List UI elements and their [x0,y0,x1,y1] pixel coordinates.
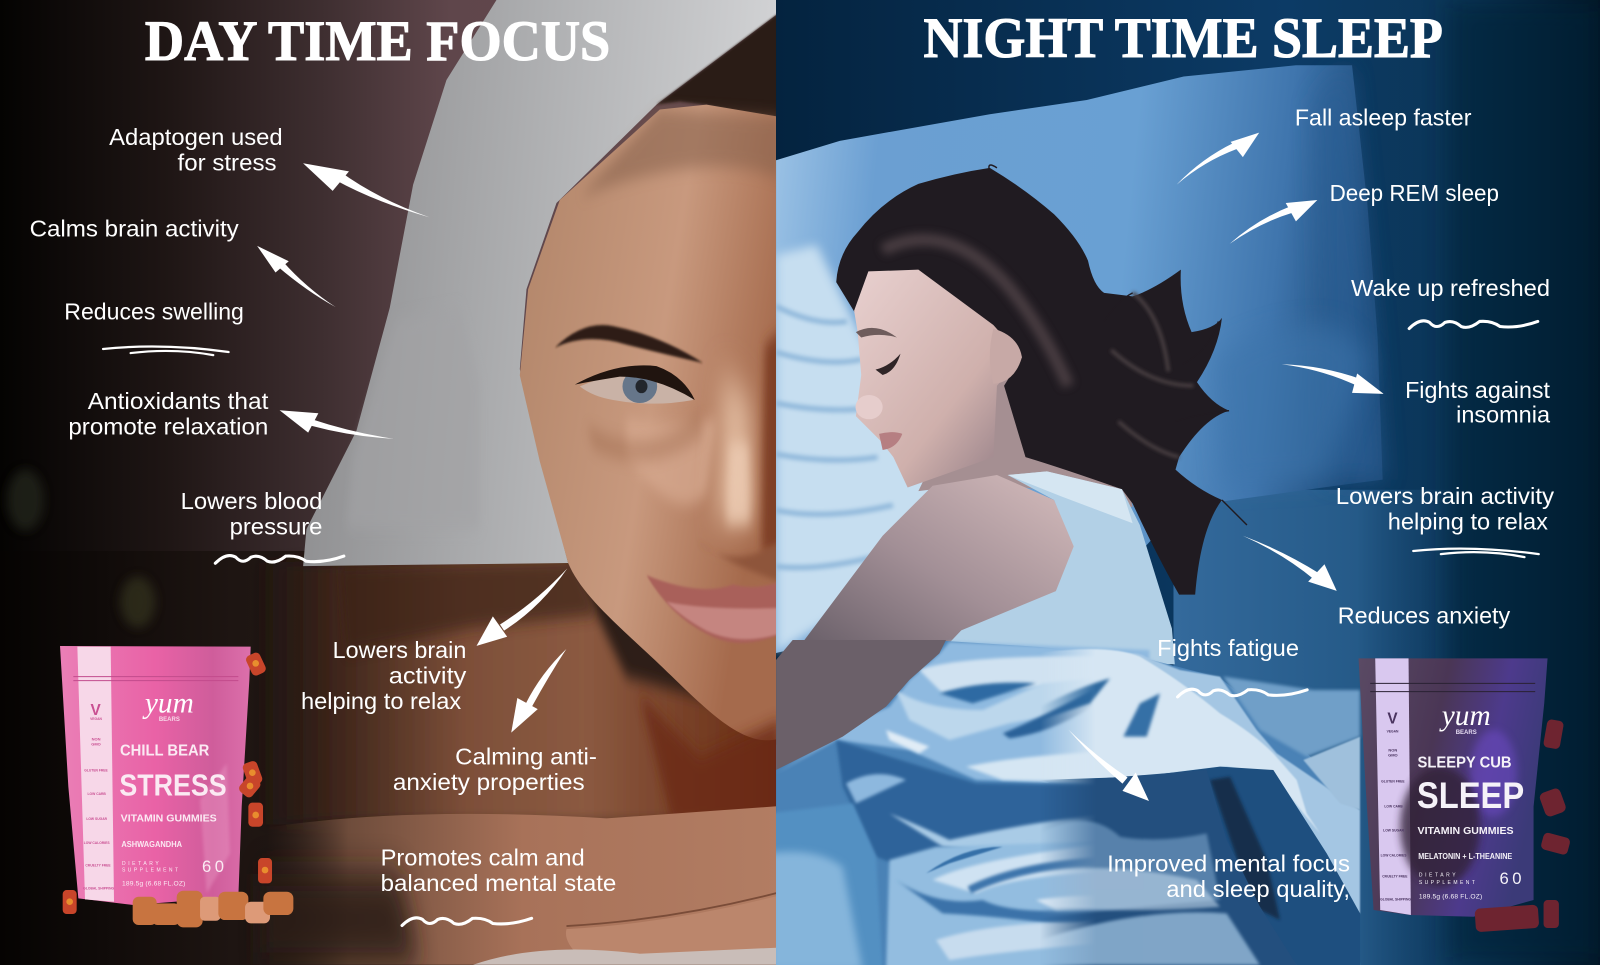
pouch side icons: GMO [91,741,101,746]
pouch side icons: NON [92,737,101,742]
pouch product name: 60 [1500,869,1522,888]
pouch brand: BEARS [159,717,180,723]
gummies: sleep pouch [1474,719,1571,932]
underline: lowers brain activity night [1413,549,1539,557]
pouch product name: 60 [202,857,224,876]
pouch side icons: LOW CALORIES [84,841,110,845]
arrow: to fights insomnia [1282,364,1384,394]
label: improved mental focus: and sleep quality, [1166,876,1350,902]
label: lowers brain activity: Lowers brain [333,637,466,663]
pouch product name: SLEEP [1417,774,1524,816]
arrow: to calms brain activity [257,246,336,307]
neck and chest [286,562,776,823]
pouch side icons [83,702,114,890]
product: sleepy cub sleep pouch [1359,658,1548,917]
pouch product name: VITAMIN GUMMIES [1418,826,1514,837]
panel: day time background [0,0,776,965]
title: night time sleep: NIGHT TIME SLEEP [923,7,1443,70]
pouch product name: STRESS [119,768,227,802]
pouch side icons: CRUELTY FREE [85,864,111,868]
lower towel [473,948,780,965]
label: fights against insomnia: insomnia [1456,401,1551,427]
label: promotes calm: balanced mental state [381,870,616,896]
pouch side icons: V [91,702,102,719]
pouch side icons: LOW CALORIES [1381,854,1407,858]
arrow: to antioxidants [280,410,394,439]
eyebrow [555,325,703,363]
pouch side icons: CRUELTY FREE [1382,874,1408,878]
label: lowers blood pressure: Lowers blood [181,488,322,514]
label: calms brain activity: Calms brain activity [30,216,239,242]
pouch side icons: LOW SUGAR [1383,829,1404,833]
label: wake up refreshed: Wake up refreshed [1351,275,1550,301]
image: woman with towel portrait [253,0,786,965]
pouch product name: VITAMIN GUMMIES [121,813,217,824]
pouch side icons: NON [1388,748,1397,753]
underline: promotes calm [402,918,532,926]
pouch product name: 189.5g (6.68 FL.OZ) [1419,893,1482,900]
pouch product name: CHILL BEAR [120,742,209,759]
label: lowers brain activity: helping to relax [301,688,461,714]
arrow: to improved mental focus [1068,730,1149,801]
arrow: to lowers brain [477,568,567,646]
label: calming anti-anxiety: anxiety properties [393,769,585,795]
tank top [929,471,1175,664]
pouch side icons: VEGAN [90,717,103,721]
neck [918,371,1133,507]
label: fights against insomnia [1405,377,1551,427]
label: lowers brain activity: activity [389,663,467,689]
pouch side icons: LOW CARB [88,792,106,796]
pouch product name [119,742,227,888]
pouch side icons: GLUTEN FREE [1381,780,1405,784]
label: adaptogen used for stress: for stress [178,149,277,175]
label: lowers brain activity night [1336,483,1554,535]
forearm [266,806,780,965]
pouch side icons [1380,710,1411,902]
label: reduces swelling: Reduces swelling [64,298,244,324]
label: antioxidants [68,388,269,440]
arrow: to calming [511,649,566,733]
blanket folds [769,640,1360,965]
pouch product name: ASHWAGANDHA [121,840,182,849]
face [854,270,1022,488]
pouch brand: yum [1439,700,1491,732]
ear [990,329,1022,384]
pouch product name: SUPPLEMENT [1419,880,1475,886]
title: day time focus: DAY TIME FOCUS [145,10,610,73]
hair [836,168,1229,595]
towel [303,0,780,566]
label: fights fatigue: Fights fatigue [1157,635,1299,661]
arrow: to adaptogen [303,163,430,217]
eye [580,376,693,404]
pouch product name: 189.5g (6.68 FL.OZ) [122,881,185,888]
image: sleeping woman on pillow [769,65,1383,965]
pouch product name: SLEEPY CUB [1418,755,1512,772]
nose [856,395,883,419]
gummies: stress pouch [63,651,293,927]
label: calming anti-anxiety: Calming anti- [455,743,597,769]
arrow: to deep rem [1230,200,1317,244]
label: antioxidants: Antioxidants that [88,388,269,414]
pouch side icons: LOW CARB [1384,804,1403,808]
pouch brand: yum [142,688,194,720]
label: improved mental focus [1107,850,1350,902]
pouch product name: DIETARY [1419,873,1456,879]
label: improved mental focus: Improved mental focus [1107,850,1350,876]
hand [566,895,780,957]
panel: night time background [776,0,1600,965]
label: reduces anxiety: Reduces anxiety [1338,602,1510,628]
arrow: to reduces anxiety [1243,536,1337,591]
label: promotes calm: Promotes calm and [381,844,585,870]
face [520,105,780,740]
label: lowers brain activity night: Lowers brain activity [1336,483,1554,509]
arrow: to fall asleep [1177,133,1259,185]
label: promotes calm [381,844,616,896]
pouch product name: MELATONIN + L-THEANINE [1418,852,1513,861]
pouch side icons: GLOBAL SHIPPING [83,886,114,890]
underline: reduces swelling [103,347,229,355]
pouch product name: DIETARY [122,861,159,867]
label: fights against insomnia: Fights against [1405,377,1550,403]
underline: fights fatigue [1178,689,1307,697]
pouch side icons: GLUTEN FREE [84,769,109,773]
underline: wake up refreshed [1409,321,1538,329]
underline: lowers blood pressure [215,556,344,563]
pouch side icons: V [1387,710,1398,727]
label: adaptogen used for stress [109,124,283,175]
pouch side icons: VEGAN [1387,729,1399,733]
pouch side icons: LOW SUGAR [86,817,108,821]
pouch brand: BEARS [1456,730,1477,736]
label: lowers brain activity night: helping to relax [1388,509,1548,535]
hair [656,12,780,118]
pouch side icons: GMO [1388,752,1398,757]
closed eye [876,354,901,375]
product: chill bear stress pouch [60,646,251,905]
pouch product name [1417,755,1524,900]
arm [804,475,1074,642]
label: antioxidants: promote relaxation [68,414,268,440]
label: calming anti-anxiety [393,743,597,795]
lips [879,432,902,450]
label: deep rem sleep: Deep REM sleep [1330,180,1499,206]
label: lowers blood pressure: pressure [230,514,322,540]
forearm over blanket [776,640,946,770]
label: lowers brain activity [301,637,467,714]
label: fall asleep faster: Fall asleep faster [1295,105,1472,131]
label: adaptogen used for stress: Adaptogen used [109,124,283,150]
label: lowers blood pressure [181,488,322,540]
lips [646,575,780,643]
pouch side icons: GLOBAL SHIPPING [1380,898,1411,902]
pillow [776,65,1383,653]
pouch product name: SUPPLEMENT [122,868,178,874]
